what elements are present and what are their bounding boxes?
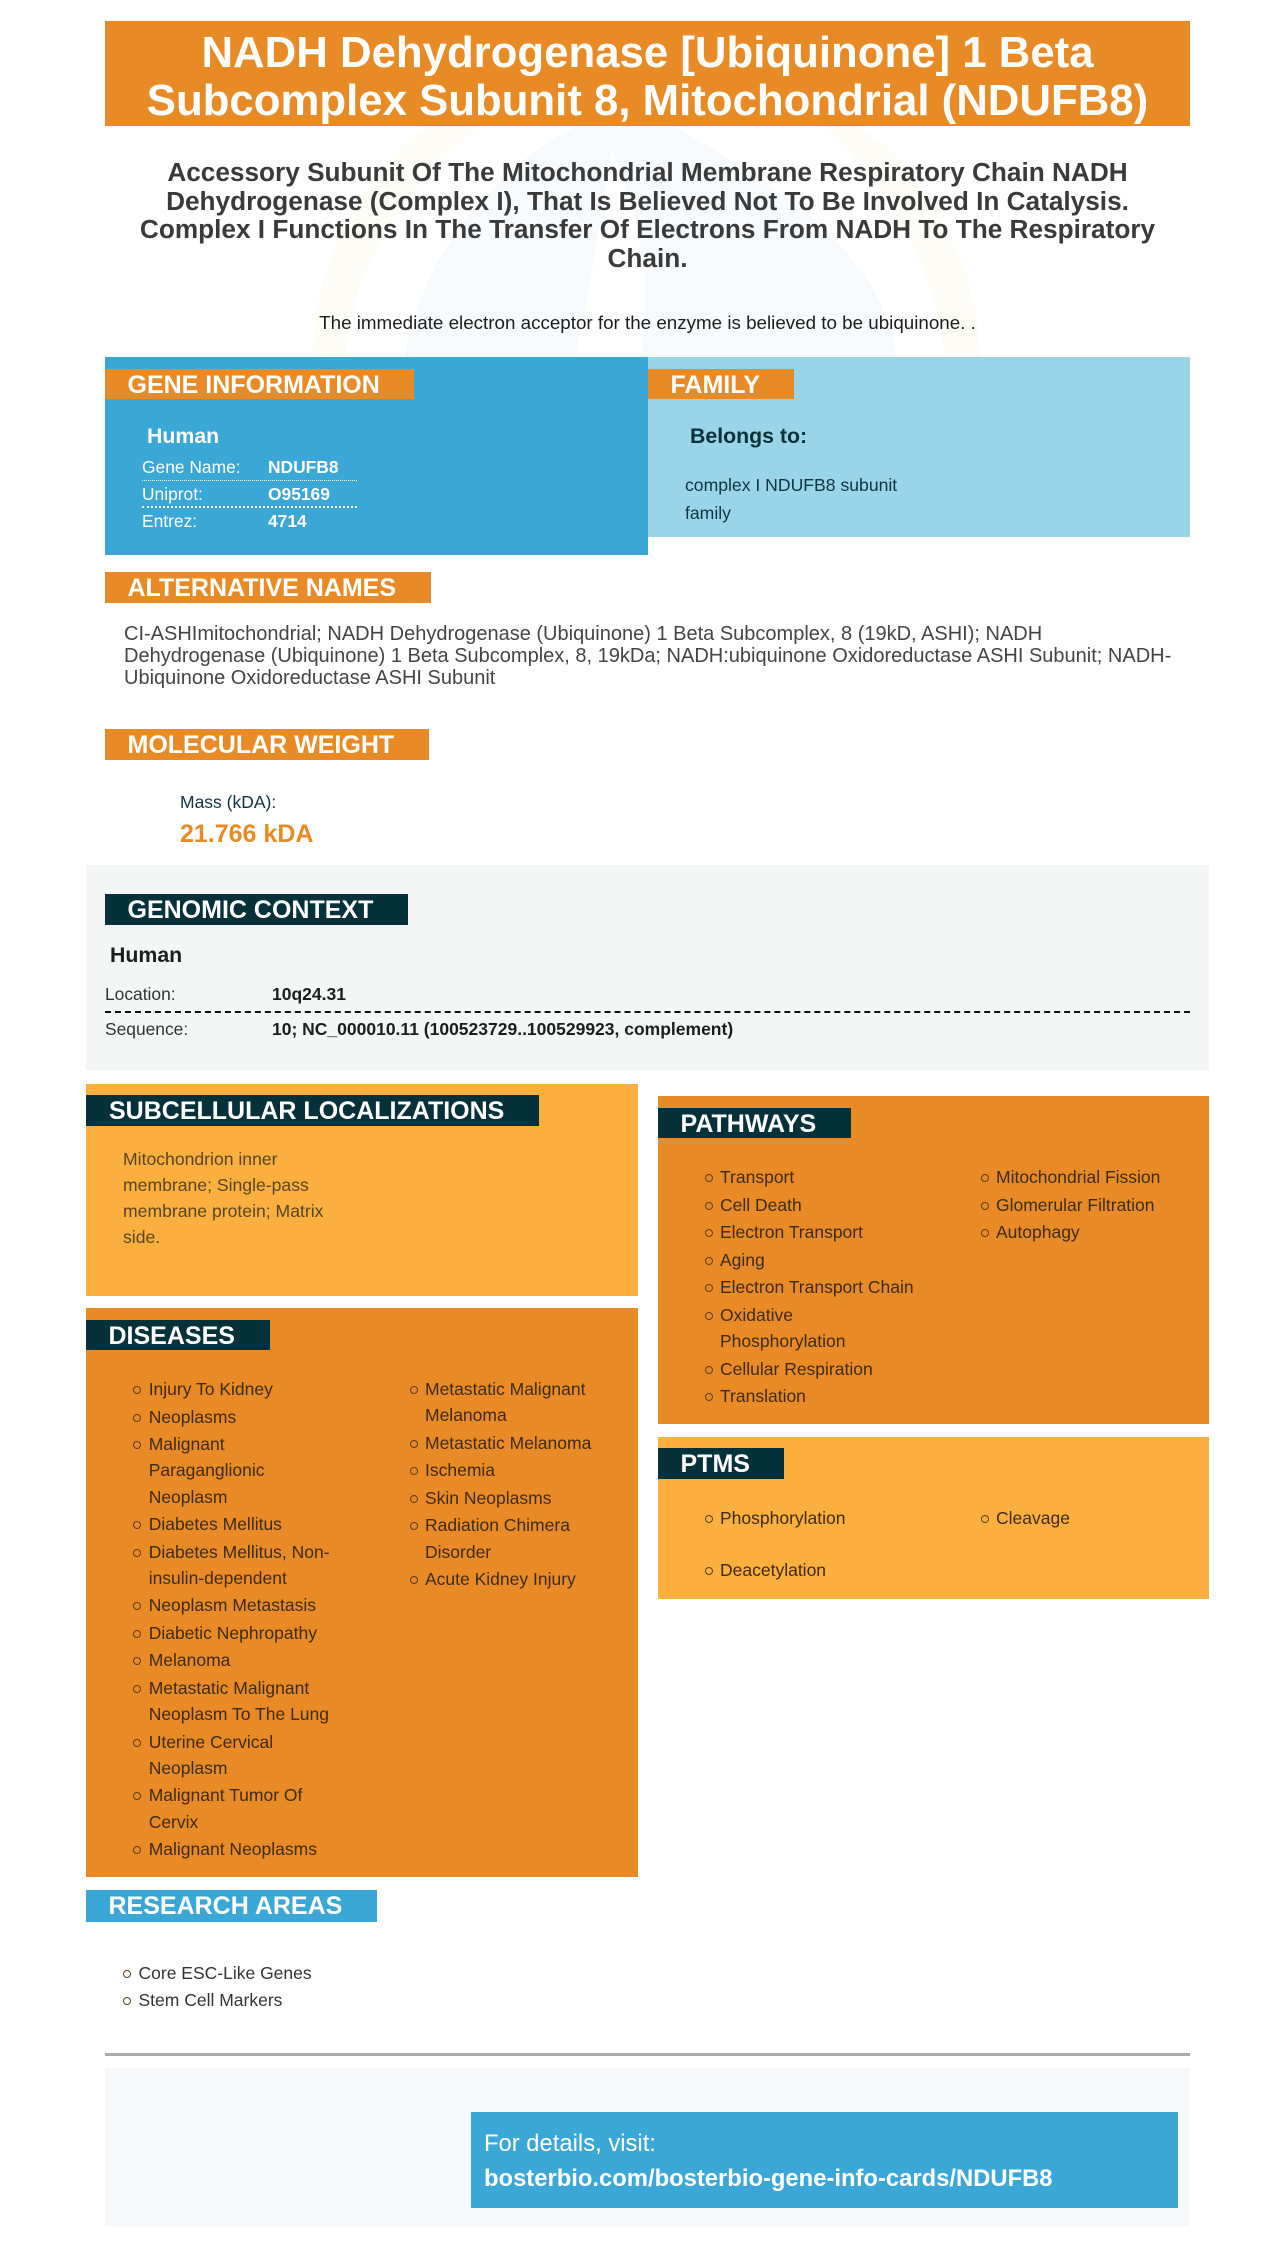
uniprot row xyxy=(142,479,357,508)
location row: 10q24.31 xyxy=(272,984,346,1004)
diseases list: Skin Neoplasms xyxy=(425,1488,551,1508)
alternative names text: Dehydrogenase (Ubiquinone) 1 Beta Subcomplex, 8, 19kDa; NADH:ubiquinone Oxidoreductase ASHI Subunit; NADH- xyxy=(124,645,1171,667)
mass value: 21.766 kDA xyxy=(180,820,313,848)
diseases list: insulin-dependent xyxy=(149,1568,287,1588)
entrez row xyxy=(142,511,307,531)
diseases list: Neoplasm xyxy=(149,1758,227,1778)
localization text: Mitochondrion inner xyxy=(123,1148,278,1168)
diseases list: Disorder xyxy=(425,1542,491,1562)
background watermark xyxy=(313,126,980,357)
family text xyxy=(685,475,897,523)
panel: gene information xyxy=(105,357,648,555)
pathways list: Electron Transport xyxy=(720,1222,863,1242)
heading: family xyxy=(648,369,794,399)
sequence row: Sequence: xyxy=(105,1019,188,1039)
diseases list: Paraganglionic xyxy=(149,1460,264,1480)
heading: ptms xyxy=(658,1448,784,1479)
details url: bosterbio.com/bosterbio-gene-info-cards/NDUFB8 xyxy=(484,2165,1053,2192)
heading: subcellular localizations: SUBCELLULAR LOCALIZATIONS xyxy=(109,1097,504,1125)
family text: complex I NDUFB8 subunit xyxy=(685,475,897,495)
diseases list: Uterine Cervical xyxy=(149,1732,273,1752)
heading: molecular weight: MOLECULAR WEIGHT xyxy=(128,731,394,759)
pathways list: Transport xyxy=(720,1167,794,1187)
diseases list: Acute Kidney Injury xyxy=(425,1569,576,1589)
callout: details link xyxy=(471,2112,1178,2208)
diseases list: Malignant Neoplasms xyxy=(149,1839,317,1859)
diseases list: Neoplasms xyxy=(149,1407,236,1427)
alternative names text: Ubiquinone Oxidoreductase ASHI Subunit xyxy=(124,667,495,689)
diseases list: Cervix xyxy=(149,1812,198,1832)
diseases list: Metastatic Malignant xyxy=(425,1379,586,1399)
diseases list: Diabetes Mellitus xyxy=(149,1514,282,1534)
title banner: NADH Dehydrogenase [Ubiquinone] 1 Beta xyxy=(201,28,1094,77)
entrez row: Entrez: xyxy=(142,511,197,531)
heading: pathways xyxy=(658,1108,851,1138)
sequence row: 10; NC_000010.11 (100523729..100529923, complement) xyxy=(272,1019,733,1039)
ptms list: Cleavage xyxy=(996,1508,1070,1528)
alternative names text: CI-ASHImitochondrial; NADH Dehydrogenase (Ubiquinone) 1 Beta Subcomplex, 8 (19kD, ASHI); NADH xyxy=(124,623,1042,645)
research areas list xyxy=(123,1963,312,2010)
localization text: membrane protein; Matrix xyxy=(123,1201,323,1221)
pathways list: Electron Transport Chain xyxy=(720,1277,914,1297)
diseases list: Malignant xyxy=(149,1434,225,1454)
research areas list: Stem Cell Markers xyxy=(138,1990,282,2010)
diseases list: Diabetic Nephropathy xyxy=(149,1623,317,1643)
pathways list: Cellular Respiration xyxy=(720,1359,873,1379)
diseases list: Metastatic Malignant xyxy=(149,1678,309,1698)
diseases list xyxy=(133,1379,592,1859)
diseases list: Neoplasm xyxy=(149,1487,227,1507)
heading: ptms: PTMS xyxy=(680,1450,750,1478)
localization text xyxy=(123,1148,324,1247)
diseases list: Neoplasm Metastasis xyxy=(149,1595,316,1615)
pathways list: Autophagy xyxy=(996,1222,1080,1242)
pathways list: Aging xyxy=(720,1250,765,1270)
diseases list: Neoplasm To The Lung xyxy=(149,1704,329,1724)
diseases list: Metastatic Melanoma xyxy=(425,1433,591,1453)
pathways list: Oxidative xyxy=(720,1305,793,1325)
mass label: Mass (kDA): xyxy=(180,792,276,812)
protein summary heading: Chain. xyxy=(607,243,688,273)
gene name row xyxy=(142,452,357,481)
panel: genomic context xyxy=(86,865,1209,1070)
diseases list: Ischemia xyxy=(425,1460,495,1480)
diseases list: Injury To Kidney xyxy=(149,1379,273,1399)
species label: Human xyxy=(110,943,182,967)
research areas list: Core ESC-Like Genes xyxy=(138,1963,312,1983)
protein summary heading: Accessory Subunit Of The Mitochondrial Membrane Respiratory Chain NADH xyxy=(167,157,1128,187)
uniprot row: O95169 xyxy=(268,484,330,504)
description sentence: The immediate electron acceptor for the enzyme is believed to be ubiquinone. . xyxy=(319,312,976,333)
panel: diseases xyxy=(86,1308,638,1877)
protein summary heading xyxy=(140,157,1155,273)
heading: alternative names: ALTERNATIVE NAMES xyxy=(128,574,396,602)
localization text: side. xyxy=(123,1227,160,1247)
ptms list: Deacetylation xyxy=(720,1560,826,1580)
diseases list: Melanoma xyxy=(149,1650,230,1670)
diseases list: Melanoma xyxy=(425,1405,507,1425)
details label: For details, visit: xyxy=(484,2130,656,2157)
panel: family xyxy=(648,357,1190,537)
family text: family xyxy=(685,503,731,523)
panel: subcellular localizations xyxy=(86,1084,638,1296)
pathways list: Mitochondrial Fission xyxy=(996,1167,1160,1187)
protein summary heading: Dehydrogenase (Complex I), That Is Believed Not To Be Involved In Catalysis. xyxy=(166,186,1129,216)
heading: pathways: PATHWAYS xyxy=(680,1110,816,1138)
pathways list: Glomerular Filtration xyxy=(996,1195,1155,1215)
heading: research areas: RESEARCH AREAS xyxy=(108,1892,342,1920)
entrez row: 4714 xyxy=(268,511,307,531)
pathways list: Cell Death xyxy=(720,1195,802,1215)
location row: Location: xyxy=(105,984,176,1004)
uniprot row: Uniprot: xyxy=(142,484,203,504)
pathways list xyxy=(705,1167,1160,1406)
heading: diseases: DISEASES xyxy=(108,1322,235,1350)
protein summary heading: Complex I Functions In The Transfer Of Electrons From NADH To The Respiratory xyxy=(140,214,1155,244)
panel: pathways xyxy=(658,1096,1209,1424)
belongs to label: Belongs to: xyxy=(690,424,807,448)
heading: family: FAMILY xyxy=(670,371,760,399)
panel: ptms xyxy=(658,1437,1209,1599)
ptms list: Phosphorylation xyxy=(720,1508,846,1528)
panel: footer xyxy=(105,2068,1190,2227)
localization text: membrane; Single-pass xyxy=(123,1175,309,1195)
title banner: Subcomplex Subunit 8, Mitochondrial (NDUFB8) xyxy=(147,76,1148,124)
title banner xyxy=(105,21,1190,126)
gene name row: NDUFB8 xyxy=(268,457,339,477)
diseases list: Diabetes Mellitus, Non- xyxy=(149,1542,330,1562)
diseases list: Radiation Chimera xyxy=(425,1515,570,1535)
location row xyxy=(105,979,1190,1013)
diseases list: Malignant Tumor Of xyxy=(149,1785,302,1805)
pathways list: Translation xyxy=(720,1386,806,1406)
gene name row: Gene Name: xyxy=(142,457,241,477)
heading: diseases xyxy=(86,1320,270,1350)
heading: genomic context: GENOMIC CONTEXT xyxy=(128,896,373,924)
heading: gene information: GENE INFORMATION xyxy=(128,371,380,399)
species label: Human xyxy=(147,424,219,448)
pathways list: Phosphorylation xyxy=(720,1331,846,1351)
alternative names text xyxy=(124,623,1171,689)
ptms list xyxy=(705,1508,1070,1580)
